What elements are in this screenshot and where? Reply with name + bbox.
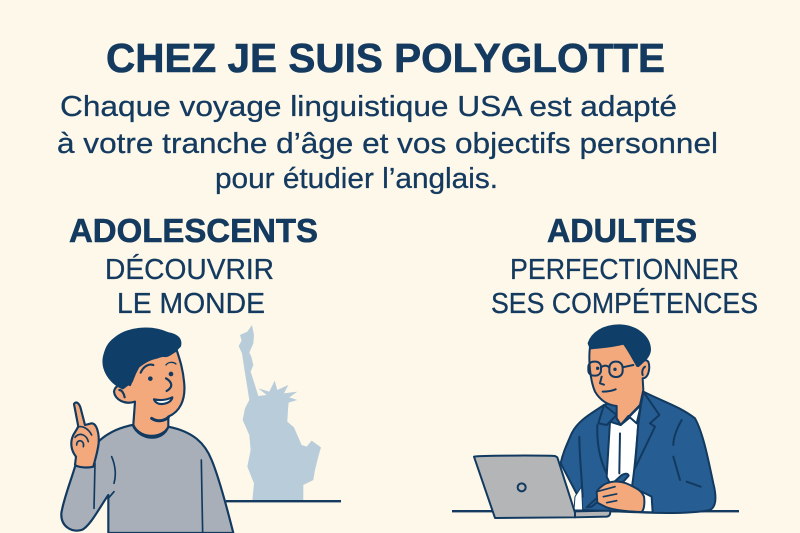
heading: adolescents (69, 213, 318, 320)
intro paragraph: Chaque voyage linguistique USA est adapté (60, 91, 677, 123)
hand (71, 403, 99, 467)
heading: adolescents: LE MONDE (117, 288, 265, 320)
head and neck (589, 343, 649, 425)
title: CHEZ JE SUIS POLYGLOTTE (106, 35, 665, 81)
illustration: adult with laptop (474, 325, 715, 518)
heading: adultes: ADULTES (547, 213, 697, 250)
glasses and face (588, 362, 645, 392)
heading: adultes (491, 213, 758, 320)
intro paragraph: pour étudier l’anglais. (215, 163, 498, 195)
hair (104, 329, 180, 388)
ground line: teen (226, 500, 341, 502)
heading: adultes: SES COMPÉTENCES (491, 287, 758, 320)
collar and lapels (598, 405, 617, 425)
intro paragraph: à votre tranche d’âge et vos objectifs personnel (57, 128, 718, 160)
heading: adultes: PERFECTIONNER (510, 254, 739, 286)
shirt (607, 416, 638, 488)
ground line: adult (452, 510, 739, 512)
illustration: statue of liberty silhouette (239, 325, 321, 501)
hand and cuff (642, 492, 653, 512)
facial features (119, 362, 176, 421)
sleeve creases (94, 457, 203, 533)
hair (589, 325, 650, 366)
neck and face (114, 350, 184, 436)
pen (587, 474, 629, 507)
sweater (61, 425, 233, 533)
heading: adolescents: ADOLESCENTS (69, 213, 318, 250)
jacket (561, 392, 715, 513)
illustration: teenager pointing up (61, 329, 233, 533)
heading: adolescents: DÉCOUVRIR (105, 253, 274, 286)
laptop (474, 456, 575, 518)
intro paragraph (57, 91, 718, 195)
